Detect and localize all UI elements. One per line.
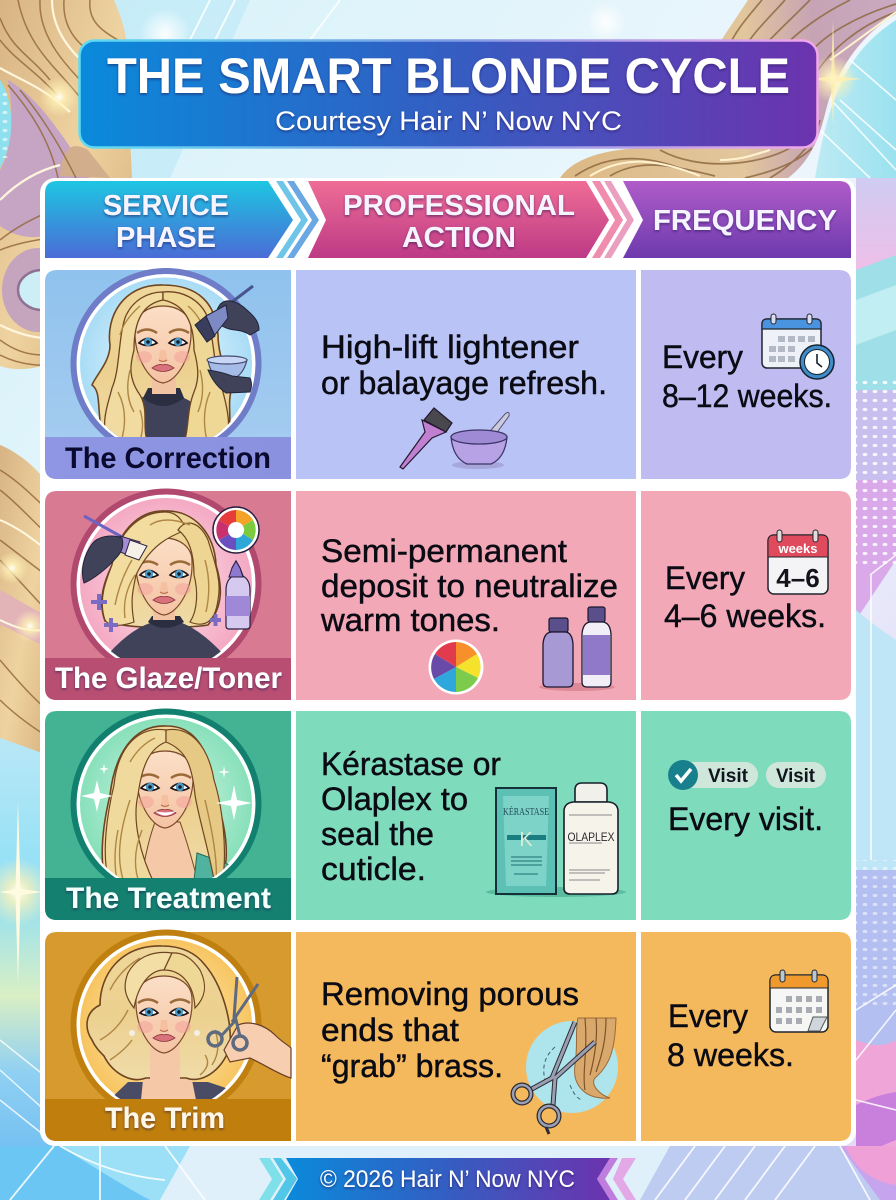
header: professional action	[308, 181, 634, 258]
label band	[45, 1099, 291, 1141]
action cell	[296, 491, 636, 700]
frequency cell	[641, 270, 851, 479]
row 1: the correction	[45, 268, 851, 479]
row 4: the trim	[45, 930, 851, 1141]
icon: olaplex bottle: OLAPLEX	[568, 830, 614, 844]
icon: kérastase sachet	[486, 788, 626, 897]
service cell	[45, 708, 291, 920]
icon: sparkles	[81, 764, 252, 820]
icon: bottles	[539, 607, 615, 691]
label band	[45, 878, 291, 920]
sparkle star	[0, 800, 52, 985]
action cell	[296, 932, 636, 1141]
icon: dye bottle	[226, 561, 250, 629]
right side geometry panel	[815, 20, 896, 1200]
background hair: top left	[0, 0, 132, 369]
row 3: the treatment	[45, 708, 851, 920]
label band	[45, 437, 291, 479]
frequency cell	[641, 491, 851, 700]
action cell: deposit to neutralize	[321, 568, 618, 604]
header: professional action: ACTION	[402, 222, 516, 254]
icon: kérastase sachet: K	[519, 829, 533, 851]
action cell: Kérastase or	[321, 746, 501, 782]
action cell: warm tones.	[320, 602, 500, 638]
action cell: cuticle.	[321, 851, 426, 887]
icon: calendar	[770, 970, 828, 1032]
icon: calendar weeks: 4–6	[776, 563, 820, 593]
frequency cell: 8 weeks.	[667, 1037, 794, 1073]
icon: color wheel	[213, 507, 259, 553]
icon: mixing bowl and hand	[207, 356, 252, 393]
title banner	[80, 40, 818, 148]
label band	[45, 658, 291, 700]
header: frequency	[623, 181, 851, 258]
action cell: Semi-permanent	[321, 533, 567, 569]
header: service phase: SERVICE	[103, 190, 229, 222]
main title: THE SMART BLONDE CYCLE	[107, 48, 790, 104]
header row	[45, 181, 851, 258]
icon: kérastase sachet: KÉRASTASE	[503, 806, 549, 818]
label: The Trim	[105, 1102, 225, 1135]
action cell: Removing porous	[321, 976, 579, 1012]
left lower sky	[0, 690, 60, 1200]
icon: brush and gloved hand	[195, 286, 259, 342]
icon: olaplex bottle	[564, 783, 618, 894]
subtitle: Courtesy Hair N’ Now NYC	[275, 106, 622, 136]
frequency cell: Every	[665, 560, 745, 596]
action cell: High-lift lightener	[321, 329, 579, 365]
icon: calendar with clock	[762, 314, 834, 379]
visit pills: Visit	[708, 766, 749, 787]
action cell: seal the	[321, 816, 434, 852]
bottom strip	[0, 1146, 896, 1200]
frequency cell: Every visit.	[668, 801, 823, 837]
frequency cell: Every	[662, 339, 743, 375]
icon: scissors cutting hair	[513, 1018, 618, 1134]
service cell	[45, 268, 291, 479]
service cell	[45, 488, 291, 700]
frequency cell: 4–6 weeks.	[664, 598, 826, 634]
portrait: long wavy hair	[92, 285, 235, 448]
icon: tint brush	[400, 408, 452, 469]
background hair: top right	[560, 0, 896, 178]
frequency cell	[641, 932, 851, 1141]
frequency cell: Every	[668, 998, 748, 1034]
portrait: straight hair, smiling	[102, 726, 230, 890]
header: service phase: PHASE	[116, 222, 216, 254]
icon: calendar weeks	[768, 530, 828, 594]
action cell	[296, 270, 636, 479]
icon: bowl	[451, 412, 509, 469]
action cell	[296, 711, 636, 920]
header: professional action: PROFESSIONAL	[343, 190, 575, 222]
visit pills	[668, 760, 826, 790]
icon: glove and tint brush	[82, 516, 147, 583]
frequency cell	[641, 711, 851, 920]
portrait: voluminous waves	[87, 946, 232, 1110]
label: The Treatment	[66, 882, 271, 915]
frequency cell: 8–12 weeks.	[662, 378, 832, 414]
service cell	[45, 930, 291, 1141]
visit pills: Visit	[776, 766, 816, 787]
action cell: ends that	[321, 1012, 459, 1048]
header: service phase	[45, 181, 319, 258]
footer banner	[259, 1158, 636, 1200]
icon: plus sparkles	[91, 594, 221, 632]
row 2: the glaze/toner	[45, 488, 851, 700]
header: frequency: FREQUENCY	[653, 205, 837, 237]
footer banner: © 2026 Hair N’ Now NYC	[320, 1166, 575, 1193]
label: The Glaze/Toner	[55, 662, 282, 695]
action cell: “grab” brass.	[321, 1048, 503, 1084]
icon: hand holding scissors	[208, 977, 291, 1078]
table card	[40, 178, 856, 1146]
action cell: or balayage refresh.	[321, 365, 607, 401]
action cell: Olaplex to	[321, 781, 468, 817]
background hair: lower left	[0, 445, 60, 760]
icon: calendar weeks: weeks	[777, 541, 818, 556]
portrait: blonde bob	[101, 510, 222, 658]
icon: color wheel	[428, 640, 484, 694]
label: The Correction	[65, 442, 271, 475]
